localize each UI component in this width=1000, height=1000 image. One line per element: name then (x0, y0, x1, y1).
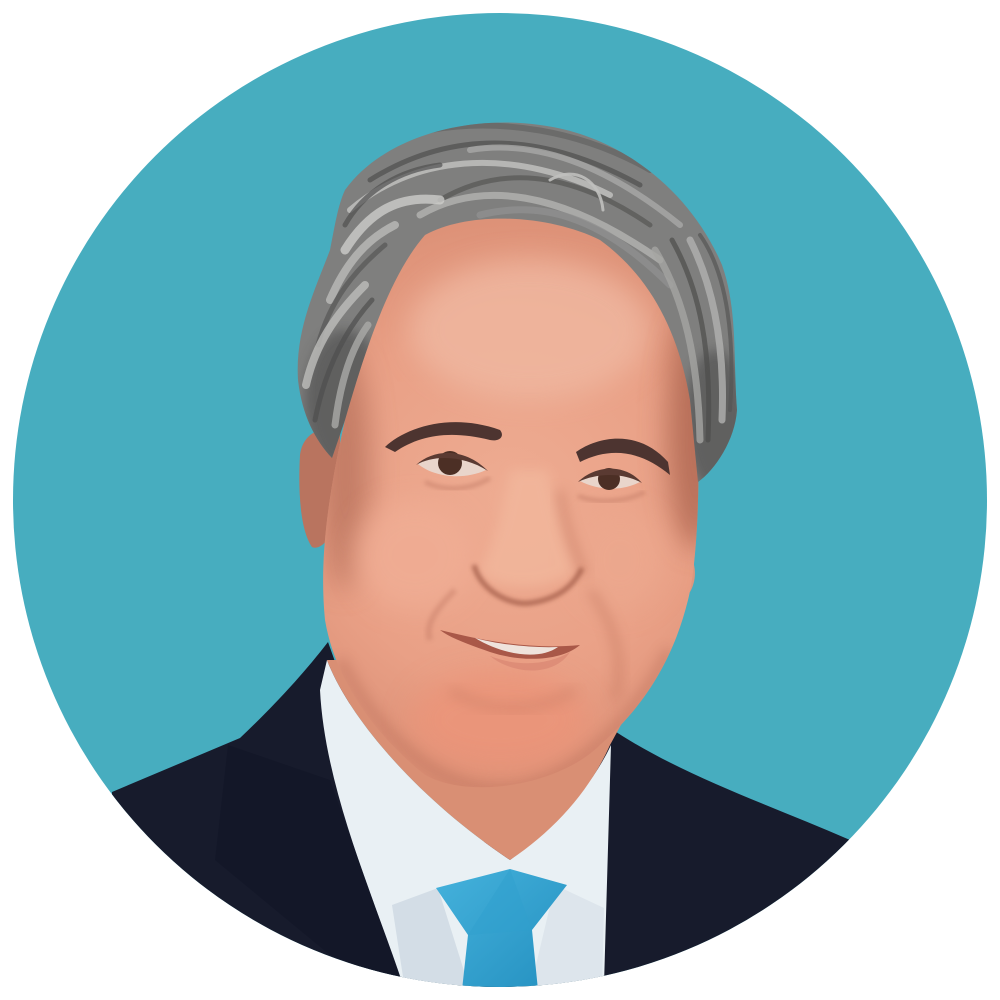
right eye (578, 468, 645, 501)
suit jacket (112, 642, 850, 1000)
left cheek (347, 512, 434, 598)
left eye (416, 451, 490, 488)
mouth (440, 630, 580, 671)
neck (327, 660, 640, 860)
jaw edge shadow (340, 650, 670, 790)
nose (474, 470, 585, 603)
hair strands (306, 126, 731, 440)
hair shadow at sides (301, 326, 370, 458)
shirt collar and front (320, 660, 611, 990)
necktie (436, 869, 567, 990)
right temple shadow (652, 326, 698, 557)
nasolabial fold left (429, 590, 455, 640)
left temple shadow (320, 350, 370, 590)
jacket lapel shading (348, 849, 400, 977)
left ear (299, 429, 340, 548)
figure clipped to circle (112, 642, 850, 1000)
right eyebrow (576, 439, 670, 475)
face with shading (323, 218, 698, 787)
chin crease (458, 694, 566, 710)
right ear (680, 550, 695, 592)
right cheek (575, 510, 665, 610)
lower face warmth (434, 675, 554, 760)
nasolabial fold right (590, 590, 619, 700)
forehead highlight (410, 260, 650, 400)
left eyebrow (385, 422, 502, 452)
hair (298, 122, 737, 482)
